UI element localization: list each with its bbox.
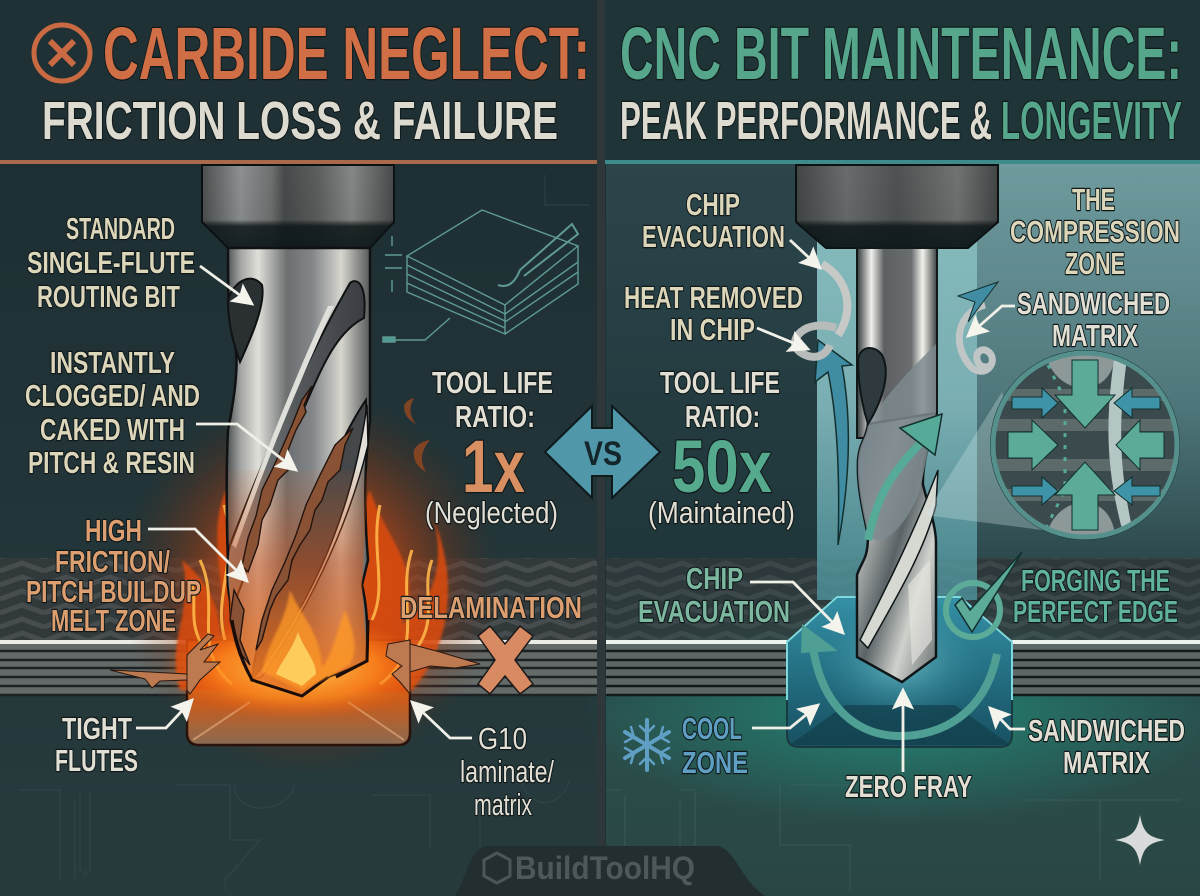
stat: maintained tool life: (Maintained): [648, 495, 795, 530]
labels: compression zone: THE: [1072, 182, 1115, 217]
icon: snowflake: [625, 720, 669, 770]
labels: heat removed: IN CHIP: [670, 312, 755, 347]
delaminated edges: [110, 634, 480, 694]
inner arrowhead: [900, 414, 942, 455]
labels: chip evacuation top: [642, 187, 785, 254]
labels: clogged: INSTANTLY: [50, 345, 175, 380]
arrow: bottom: [1055, 462, 1115, 530]
labels: g10: G10: [478, 721, 527, 756]
stat: maintained tool life: [648, 365, 795, 530]
labels: chip evacuation lower: CHIP: [686, 561, 743, 596]
labels: heat removed: HEAT REMOVED: [624, 280, 803, 315]
subtitle: friction loss: FRICTION LOSS & FAILURE: [42, 91, 558, 151]
arrow: tight flutes: [136, 700, 192, 728]
icon: coated bit: [796, 165, 998, 682]
arrow: melt zone: [148, 529, 247, 581]
panel: right header: [605, 0, 1200, 164]
stat: maintained tool life: RATIO:: [685, 399, 760, 434]
polished blade: [252, 405, 368, 680]
edge highlight: [860, 470, 938, 648]
arrow: heat removed: [757, 328, 808, 349]
arrow: sandwiched lower: [990, 708, 1025, 729]
labels: standard bit: SINGLE-FLUTE: [27, 245, 195, 280]
labels: chip evacuation top: CHIP: [686, 187, 740, 222]
flute teardrop: [228, 279, 263, 362]
labels: heat removed: [624, 280, 803, 347]
labels: g10: matrix: [474, 787, 532, 822]
icon: check mark badge: [946, 552, 1022, 637]
flute: lower sweep: [252, 400, 367, 680]
panel: neglect scene: [0, 164, 597, 896]
labels: sandwiched matrix lower: [1028, 713, 1185, 780]
labels: sandwiched matrix upper: MATRIX: [1052, 318, 1138, 353]
labels: tight flutes: FLUTES: [55, 743, 138, 778]
arrow: blue flow: [815, 340, 852, 545]
labels: melt zone: [26, 513, 201, 638]
arrow: sandwiched upper: [968, 306, 1015, 336]
icon: router bit neglected: [202, 165, 394, 696]
labels: melt zone: PITCH BUILDUP: [26, 574, 201, 609]
arrow: left: [1008, 420, 1058, 470]
arrow: swirl under bit: [802, 626, 997, 736]
fluted body: [857, 413, 936, 682]
labels: standard bit: STANDARD: [66, 211, 175, 246]
labels: tight flutes: [55, 711, 138, 778]
labels: standard bit: [27, 211, 195, 314]
labels: g10: [460, 721, 554, 822]
labels: melt zone: MELT ZONE: [51, 603, 176, 638]
pitch buildup: [230, 386, 353, 665]
center divider: [597, 0, 605, 896]
shank: [857, 248, 937, 438]
label: delamination: DELAMINATION: [400, 590, 582, 625]
stat: neglected tool life: [425, 365, 558, 530]
labels: tight flutes: TIGHT: [62, 711, 132, 746]
title: carbide neglect: CARBIDE NEGLECT:: [103, 12, 590, 95]
flames back: [163, 490, 448, 720]
labels: compression zone: [1010, 182, 1180, 281]
flames front: [262, 398, 430, 690]
arrow: g10: [412, 702, 472, 738]
polished edge: [232, 306, 334, 548]
bit tip: [232, 620, 368, 696]
collet holder right: [796, 165, 998, 248]
labels: standard bit: ROUTING BIT: [37, 279, 180, 314]
stat: neglected tool life: TOOL LIFE: [432, 365, 553, 400]
arrow: versus double arrow: VS: [584, 435, 622, 473]
labels: chip evacuation lower: [638, 561, 790, 629]
arrow: chip evacuation lower: [750, 582, 843, 633]
arrow: zero fray: [902, 690, 904, 772]
labels: sandwiched matrix lower: MATRIX: [1063, 745, 1150, 780]
label: cool zone: ZONE: [682, 745, 748, 780]
arrow: top: [1055, 360, 1115, 428]
flute sweep: [858, 344, 936, 540]
labels: chip evacuation top: EVACUATION: [642, 219, 785, 254]
labels: clogged: CLOGGED/ AND: [25, 378, 200, 413]
labels: melt zone: FRICTION/: [55, 544, 170, 579]
label: zero fray: ZERO FRAY: [845, 769, 972, 804]
watermark: brand: [455, 846, 765, 896]
labels: chip evacuation lower: EVACUATION: [638, 594, 790, 629]
inner flute arrow: [868, 438, 925, 540]
stat: maintained tool life: TOOL LIFE: [660, 365, 780, 400]
arrow: clogged: [196, 424, 296, 470]
watermark: brand: BuildToolHQ: [515, 850, 695, 886]
labels: sandwiched matrix upper: [1017, 286, 1170, 353]
panel: left header: [0, 0, 597, 164]
stat: neglected tool life: RATIO:: [455, 399, 535, 434]
icon: failure X: [34, 25, 90, 81]
arrows: blue: [1012, 388, 1160, 505]
flute: upper sweep: [227, 281, 365, 610]
arrow: versus double arrow: [545, 406, 660, 498]
arrow: right: [1116, 420, 1164, 470]
labels: clogged: PITCH & RESIN: [28, 445, 195, 480]
laminate schematic icon: [383, 210, 578, 342]
icon: chip curls: [795, 264, 992, 371]
heat overlay: [228, 470, 368, 696]
bit body: [227, 248, 370, 696]
arrow: chip evacuation top: [790, 240, 820, 268]
label: forging the perfect edge: [1013, 563, 1178, 629]
labels: melt zone: HIGH: [85, 513, 142, 548]
stat: neglected tool life: 1x: [462, 425, 525, 508]
cavity: left cut pocket: [187, 640, 410, 745]
icon: delamination X: [478, 626, 533, 694]
labels: clogged: [25, 345, 200, 480]
cavity: right pocket: [787, 595, 1012, 747]
collet holder: [202, 165, 394, 248]
labels: clogged: CAKED WITH: [40, 412, 185, 447]
arrow: standard bit: [200, 266, 252, 304]
chart: compression zone circle: [990, 351, 1180, 540]
label: cool zone: [682, 711, 748, 780]
stat: neglected tool life: (Neglected): [425, 495, 558, 530]
arrow: cool zone: [752, 705, 818, 728]
labels: g10: laminate/: [460, 754, 554, 789]
icon: sparkle: [1115, 815, 1165, 865]
label: cool zone: COOL: [682, 711, 742, 746]
spotlight to compression zone: [925, 392, 1042, 530]
stat: maintained tool life: 50x: [672, 425, 772, 508]
panel: maintenance scene: [580, 164, 1200, 896]
arrowhead: curl top: [958, 282, 998, 322]
flute teardrop: [858, 348, 886, 424]
lower highlight: [908, 560, 932, 665]
labels: compression zone: ZONE: [1065, 246, 1125, 281]
